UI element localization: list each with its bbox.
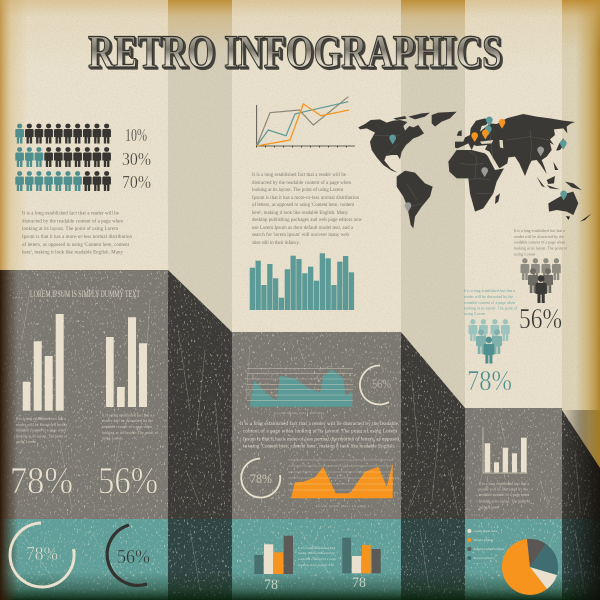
row: 70%: 70%: [122, 172, 151, 192]
text block: grey panel paragraph: It is a long established fact that a reader will be distracted by the readable: [240, 422, 399, 427]
text block: right panel caption: reader will be distracted by the: [479, 488, 528, 492]
text block: left paragraph: looking at its layout. The point of using Lorem: [22, 227, 118, 232]
continent: North America: [358, 119, 424, 173]
text block: panel caption one: reader will be distracted by the: [16, 423, 67, 427]
text block: grey panel paragraph: content of a page when looking at its layout. The point of using Lorem: [243, 430, 397, 434]
text block: left paragraph: Ipsum is that it has a more-or-less normal distribution: [22, 235, 133, 240]
ring: 56% teal band: [107, 525, 150, 585]
text block: teal paragraph: looking at its layout. The point of: [464, 306, 518, 310]
text block: centre paragraph: of letters, as opposed to using 'Content here, content: [252, 203, 355, 208]
ring: 78% panel: [241, 458, 280, 497]
borders: [372, 130, 550, 207]
text block: right paragraph: It is a long established fact that a: [514, 229, 565, 233]
text block: right panel caption: using Lorem: [479, 506, 499, 510]
pictogram: grey people group: [520, 258, 561, 303]
text block: panel caption two: readable content of a page when: [102, 425, 152, 429]
text block: right paragraph: readable content of a page when: [514, 240, 565, 244]
ring: 78% panel: 78%: [250, 471, 272, 486]
texture: scratches and speckle: [0, 270, 600, 600]
continent: Eurasia: [455, 114, 575, 176]
text block: right paragraph: using Lorem: [514, 252, 535, 256]
seas: Black Sea and Caspian: [480, 140, 503, 148]
continent: Africa: [448, 150, 504, 212]
legend: pie chart: [467, 529, 505, 560]
continent: Greenland: [432, 112, 457, 127]
pictogram: people percentages: [15, 124, 151, 192]
text block: panel caption two: [102, 414, 159, 440]
text block: centre paragraph: distracted by the readable content of a page when: [252, 181, 352, 186]
bar chart: teal band two: [342, 538, 381, 591]
bar chart: teal band two: 78: [352, 575, 366, 591]
legend: pie chart: Simply dummy: [474, 538, 494, 542]
text block: teal band paragraph: [298, 546, 336, 567]
ring: 56% panel: [360, 365, 391, 404]
panel: teal band: [0, 519, 600, 600]
panel heading: LOREM IPSUM IS SIMPLY DUMMY TEXT: [30, 289, 140, 299]
row: 10%: 10%: [125, 125, 147, 145]
map pins: [389, 117, 567, 212]
island: New Guinea: [565, 182, 582, 190]
text block: panel caption two: looking at its layout. The point of: [102, 431, 159, 435]
stat: 56% large: 56%: [98, 460, 158, 502]
text block: panel caption one: It is a long established fact that a: [16, 417, 66, 421]
ring: 78% teal band: [10, 523, 74, 587]
text block: grey panel paragraph: Ipsum is that it has a more-or-less normal distribution of letters, as opposed: [243, 438, 400, 442]
continent: South America: [397, 171, 433, 228]
continent: Arctic islands: [393, 113, 430, 120]
text block: panel caption one: [16, 417, 68, 444]
area chart: teal: [247, 368, 353, 407]
text block: right panel caption: [479, 482, 531, 510]
text block: panel caption two: using Lorem: [102, 436, 122, 440]
text block: panel caption one: looking at its layout. The point of: [16, 434, 68, 438]
text block: right paragraph: [514, 229, 568, 256]
stat: 78% teal: 78%: [467, 365, 512, 397]
caption: orange area chart: Lorem ipsum dolor sit amet: [316, 504, 366, 508]
text block: teal paragraph: It is a long established fact that a: [464, 289, 515, 293]
caption: teal area chart: Lorem ipsum dolor sit amet: [274, 411, 324, 415]
text block: centre paragraph: here', making it look like readable English. Many: [252, 211, 349, 216]
island: Madagascar: [495, 193, 500, 204]
text block: left paragraph: [22, 212, 133, 256]
text block: centre paragraph: search for 'lorem ipsum' will uncover many web: [252, 233, 350, 238]
world map: [358, 112, 592, 228]
text block: panel caption one: using Lorem: [16, 440, 36, 444]
text block: panel caption two: It is a long established fact that a: [102, 414, 152, 418]
pictogram: teal people group: [468, 319, 510, 364]
area chart: orange: [288, 460, 393, 498]
text block: centre paragraph: sites still in their infancy.: [252, 241, 300, 246]
text block: right paragraph: reader will be distracted by the: [514, 235, 564, 239]
text block: centre paragraph: Ipsum is that it has a more-or-less normal distribution: [252, 196, 360, 201]
text block: right panel caption: looking at its layout. The point of: [479, 500, 531, 504]
bar chart: teal band one: 78: [264, 577, 278, 593]
pie chart: [502, 539, 558, 595]
continent: Australia: [548, 192, 578, 215]
text block: centre paragraph: use Lorem Ipsum as their default model text, and a: [252, 226, 354, 231]
text block: grey panel paragraph: to using 'Content here, content here', making it look like readable English.: [243, 444, 395, 450]
bar chart: teal columns: [250, 253, 354, 310]
text block: teal paragraph: [464, 289, 518, 316]
ring: 56% teal band: 56%: [117, 546, 150, 568]
text block: teal paragraph: using Lorem: [464, 312, 485, 316]
text block: teal paragraph: readable content of a page when: [464, 301, 515, 305]
legend: pie chart: Lorem ipsum dolor: [474, 529, 498, 533]
text block: teal band paragraph: readable content of a page: [298, 557, 336, 561]
text block: centre paragraph: desktop publishing packages and web page editors now: [252, 218, 362, 223]
text block: teal band paragraph: looking at its layout. The: [298, 563, 334, 567]
line chart: [256, 97, 355, 147]
text block: left paragraph: It is a long established fact that a reader will be: [22, 212, 119, 216]
ring: 78% teal band: 78%: [26, 543, 58, 565]
islands: UK, Japan and South-East Asia: [457, 130, 565, 189]
text block: panel caption two: reader will be distracted by the: [102, 419, 153, 423]
text block: teal band paragraph: reader will be distracted by: [298, 551, 335, 555]
text block: left paragraph: here', making it look like readable English. Many: [22, 250, 124, 256]
ring: 56% panel: 56%: [372, 376, 391, 391]
panel: grey blocks: [0, 270, 562, 519]
text block: right paragraph: looking at its layout. The point of: [514, 246, 568, 250]
text block: panel caption one: readable content of a page when: [16, 428, 66, 432]
bar chart: left panel one: [23, 314, 64, 411]
bar chart: right panel: [483, 427, 528, 473]
stat: 56%: 56%: [519, 303, 562, 335]
text block: teal band paragraph: It is a long established fact: [298, 546, 335, 550]
text block: left paragraph: of letters, as opposed to using 'Content here, content: [22, 243, 130, 248]
text block: centre paragraph: looking at its layout. The point of using Lorem: [252, 188, 343, 193]
text block: centre paragraph: [252, 173, 362, 246]
text block: centre paragraph: It is a long established fact that a reader will be: [252, 173, 346, 178]
islands: New Zealand: [566, 213, 592, 222]
text block: grey panel paragraph: [240, 422, 400, 450]
panel: dark folded shadows: [168, 270, 600, 519]
text block: right panel caption: readable content of a page when: [479, 493, 529, 497]
legend: pie chart: Industry's printer text here: [474, 547, 505, 551]
stat: 78% large: 78%: [10, 460, 73, 502]
row: 30%: 30%: [122, 149, 151, 169]
bar chart: left panel two: [106, 317, 147, 407]
bar chart: teal band one: [254, 536, 293, 593]
legend: pie chart: Standard text: [474, 556, 494, 560]
text block: teal paragraph: reader will be distracted by the: [464, 295, 513, 299]
text block: left paragraph: distracted by the readable content of a page when: [22, 220, 124, 224]
text block: right panel caption: It is a long established fact that a: [479, 482, 529, 486]
